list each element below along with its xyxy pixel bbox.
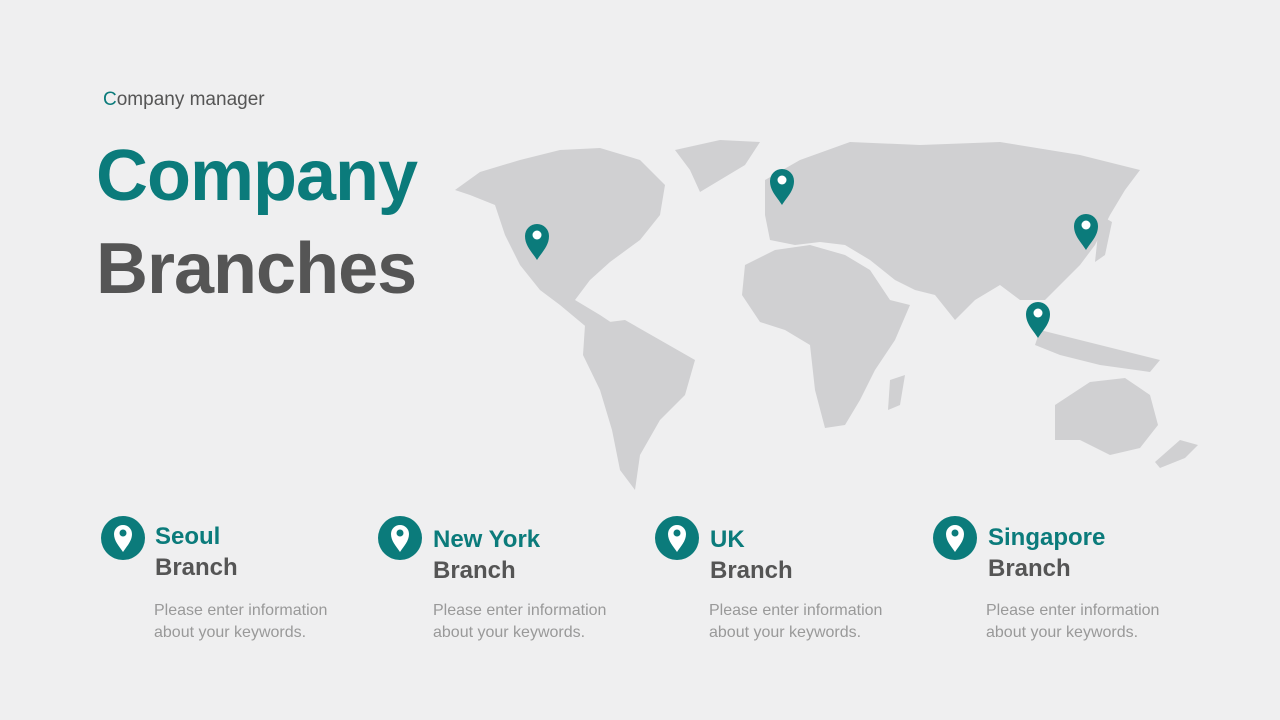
- branch: UK: about your keywords.: [709, 624, 861, 641]
- icon: pin: [101, 516, 145, 560]
- branch: UK: UK: [710, 526, 745, 553]
- branch: Singapore: about your keywords.: [986, 624, 1138, 641]
- icon: pin: [655, 516, 699, 560]
- branch: Seoul: Seoul: [155, 523, 220, 550]
- branch: New York: [378, 516, 606, 641]
- australia: [1055, 378, 1158, 455]
- branch: Seoul: [101, 516, 327, 641]
- branch: Seoul: about your keywords.: [154, 624, 306, 641]
- africa: [742, 245, 910, 428]
- branch: Singapore: Singapore: [988, 524, 1105, 551]
- indonesia: [1035, 330, 1160, 372]
- south america: [583, 320, 695, 490]
- icon: pin: [933, 516, 977, 560]
- branch: New York: about your keywords.: [433, 624, 585, 641]
- madagascar: [888, 375, 905, 410]
- branch: New York: Please enter information: [433, 602, 606, 619]
- branch: Seoul: Branch: [155, 554, 238, 581]
- branch: Seoul: Please enter information: [154, 602, 327, 619]
- greenland: [675, 140, 760, 192]
- branch: New York: New York: [433, 526, 540, 553]
- map pins: [525, 169, 1098, 338]
- branch: Singapore: Branch: [988, 555, 1071, 582]
- title line 2: Branches: [96, 229, 416, 309]
- branch: UK: Branch: [710, 557, 793, 584]
- title line 1: Company: [96, 136, 417, 216]
- branch: New York: Branch: [433, 557, 516, 584]
- branch: Singapore: [933, 516, 1159, 641]
- north america: [455, 148, 665, 330]
- japan: [1095, 215, 1112, 262]
- branch: Singapore: Please enter information: [986, 602, 1159, 619]
- new zealand: [1155, 440, 1198, 468]
- subtitle: Company manager: [103, 89, 265, 110]
- eurasia: [765, 142, 1140, 320]
- branch: UK: Please enter information: [709, 602, 882, 619]
- branch: UK: [655, 516, 882, 641]
- icon: pin: [378, 516, 422, 560]
